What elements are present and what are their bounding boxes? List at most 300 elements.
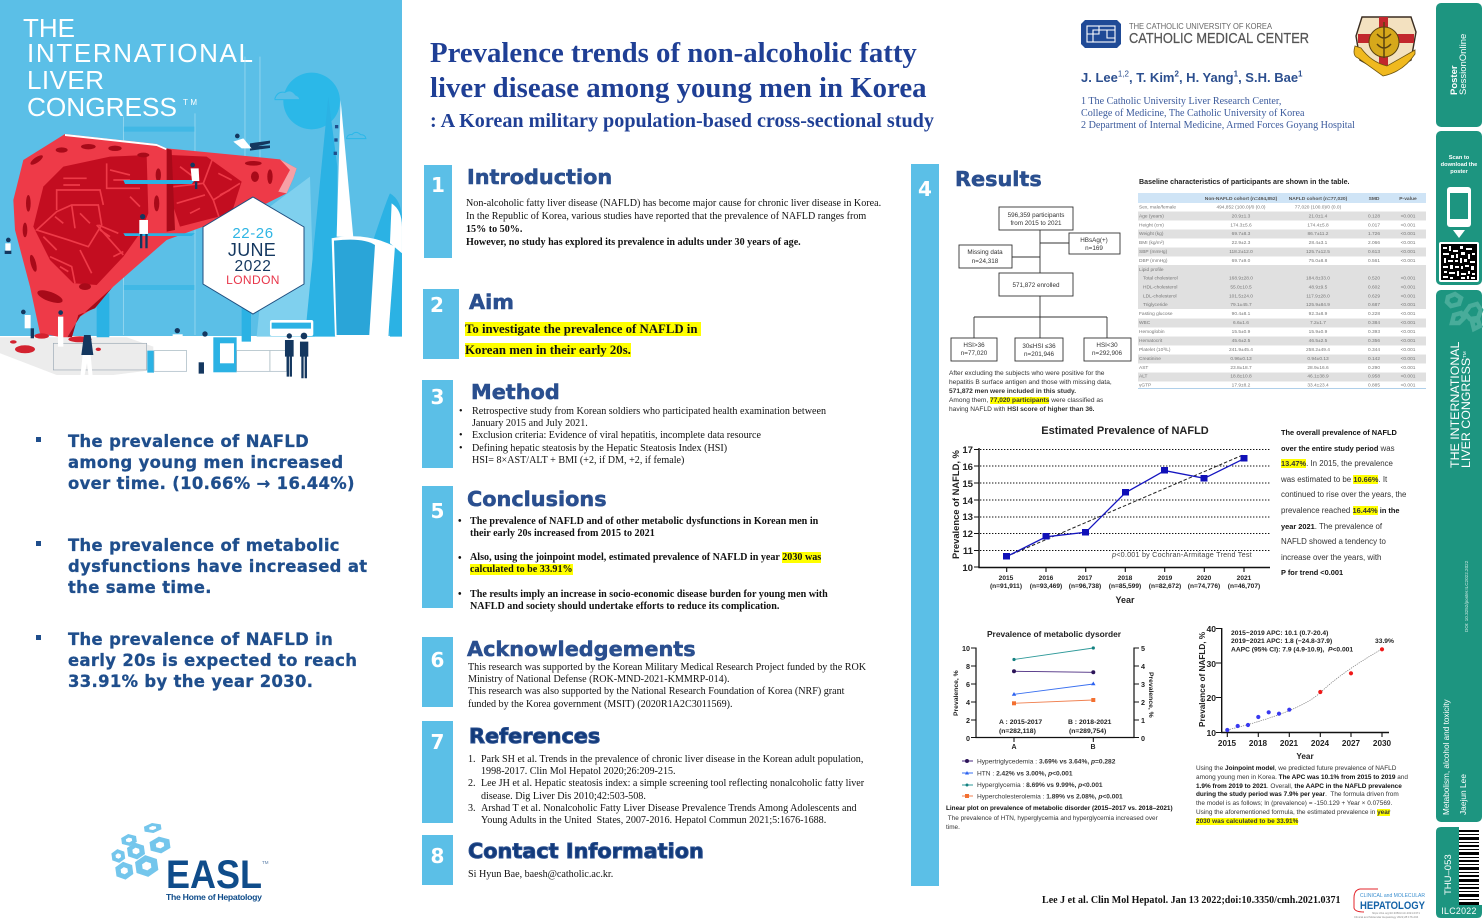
conclusion 2: Also, using the joinpoint model, estimated prevalence of NAFLD in year 2030 was (470, 552, 821, 563)
sidebar: scan to download: download the (1441, 162, 1477, 168)
section number 8: 8 (431, 844, 444, 868)
illustration: red liver (13, 134, 297, 338)
baseline characteristics table: 22.9±2.3 (1232, 240, 1251, 246)
chart: joinpoint projection to 2030: 33.9% (1375, 638, 1394, 645)
chart interpretation text: prevalence reached 16.44% in the (1281, 506, 1400, 515)
baseline characteristics table: 494,852 (100.0)/0 (0.0) (1216, 204, 1266, 210)
baseline characteristics table: 258.2±49.4 (1306, 347, 1330, 353)
chart: joinpoint projection to 2030: 2019~2021 APC: 1.8 (−24.8-37.9) (1231, 638, 1332, 645)
chart: estimated prevalence of NAFLD: p<0.001 by Cochran-Armitage Trend Test (1111, 550, 1252, 559)
key finding 3: 33.91% by the year 2030. (68, 672, 313, 691)
baseline characteristics table: 46.1±38.9 (1307, 374, 1329, 380)
chart: estimated prevalence of NAFLD: 2018 (1118, 575, 1133, 582)
baseline characteristics table: Platelet (10³/L) (1139, 347, 1171, 353)
chart: prevalence of metabolic dysorder: 5 (1141, 644, 1145, 653)
method text: Exclusion criteria: Evidence of viral hepatitis, incomplete data resource (472, 430, 761, 441)
chart: prevalence of metabolic dysorder: 3 (1141, 680, 1145, 689)
key finding 1: over time. (10.66% → 16.44%) (68, 474, 355, 493)
logo: Catholic Medical Center: CATHOLIC MEDICAL CENTER (1129, 31, 1309, 47)
acknowledgement text: This research was supported by the Korean Military Medical Research Project funded by the ROK (468, 662, 866, 673)
legend: HTN : 2.42% vs 3.00%, p<0.001 (977, 770, 1073, 778)
chart: prevalence of metabolic dysorder: 1 (1141, 716, 1145, 725)
chart: joinpoint projection to 2030: 2030 (1373, 739, 1392, 748)
baseline characteristics table: 0.520 (1368, 276, 1380, 282)
baseline characteristics table: 46.5±2.5 (1309, 338, 1328, 344)
chart: joinpoint projection to 2030: 20 (1206, 693, 1216, 703)
joinpoint model text: during the study period was 7.9% per year. The formula driven from (1196, 791, 1399, 798)
flowchart of participants: n=169 (1085, 245, 1103, 252)
chart: prevalence of metabolic dysorder: (n=289,754) (1069, 728, 1106, 735)
baseline characteristics table: <0.001 (1401, 294, 1416, 300)
baseline characteristics table: 23.8±18.7 (1230, 365, 1252, 371)
baseline characteristics table: WBC (1139, 320, 1151, 326)
baseline characteristics table: DBP (mmHg) (1139, 258, 1168, 264)
key finding 1 (36, 432, 355, 493)
baseline characteristics table: LDL-cholesterol (1143, 294, 1177, 300)
panel: references (422, 721, 864, 826)
section number 5: 5 (431, 499, 444, 523)
key finding 1: among young men increased (68, 453, 343, 472)
joinpoint model text: Using the aforementioned formula, the estimated prevalence in year (1196, 809, 1390, 816)
chart: prevalence of metabolic dysorder: B : 2018-2021 (1068, 719, 1112, 726)
section number 3: 3 (431, 385, 444, 409)
panel: results rail (911, 164, 939, 886)
sidebar: poster session online: SessionOnline (1458, 34, 1469, 95)
congress title: THE (23, 13, 75, 43)
conclusion 1: The prevalence of NAFLD and of other metabolic dysfunctions in Korean men in (470, 516, 818, 527)
introduction text: Non-alcoholic fatty liver disease (NAFLD) has become major cause for chronic liver disease in Korea. (466, 198, 881, 209)
chart: prevalence of metabolic dysorder: A (1011, 744, 1017, 751)
baseline characteristics table: 174.3±5.6 (1230, 222, 1252, 228)
baseline characteristics table: 184.8±33.0 (1306, 276, 1330, 282)
baseline characteristics table: 15.9±0.9 (1309, 329, 1328, 335)
baseline characteristics table: <0.001 (1401, 214, 1416, 220)
chart: estimated prevalence of NAFLD: (n=85,599) (1109, 583, 1141, 590)
panel: results rail: 4 (918, 177, 932, 201)
chart: joinpoint projection to 2030: 10 (1206, 728, 1216, 738)
logo: Clinical and Molecular Hepatology (1354, 888, 1426, 919)
conclusion 3: The results imply an increase in socio-economic disease burden for young men with (470, 589, 828, 600)
baseline characteristics table: 0.128 (1368, 214, 1380, 220)
flowchart of participants: HBsAg(+) (1080, 237, 1108, 244)
baseline characteristics table: ALT (1139, 374, 1148, 380)
section number 1 (424, 165, 452, 258)
logo: EASL (111, 823, 269, 902)
chart interpretation text: was estimated to be 10.66%. It (1281, 475, 1387, 484)
baseline characteristics table: γGTP (1139, 382, 1151, 388)
baseline characteristics table: <0.001 (1401, 276, 1416, 282)
baseline characteristics table: <0.001 (1401, 240, 1416, 246)
chart: prevalence of metabolic dysorder: B (1090, 744, 1096, 751)
reference list: 1998-2017. Clin Mol Hepatol 2020;26:209-215. (481, 766, 676, 777)
baseline characteristics table: 101.5±24.0 (1229, 294, 1253, 300)
chart: prevalence of metabolic dysorder: 0 (966, 734, 970, 743)
chart: prevalence of metabolic dysorder: 10 (962, 644, 970, 653)
conclusion 2 (470, 552, 821, 575)
chart: estimated prevalence of NAFLD: 10 (962, 563, 973, 574)
baseline characteristics table: 1.726 (1368, 231, 1380, 237)
section number 7 (422, 721, 453, 823)
baseline characteristics table: <0.001 (1401, 338, 1416, 344)
hexagon: date and city: 2022 (235, 258, 271, 275)
baseline characteristics table: 0.017 (1368, 222, 1380, 228)
reference numbers: 1. (468, 754, 476, 765)
chart: joinpoint projection to 2030: 2015~2019 APC: 10.1 (0.7-20.4) (1231, 630, 1328, 637)
baseline characteristics table: 28.4±3.1 (1309, 240, 1328, 246)
baseline characteristics table: <0.001 (1401, 258, 1416, 264)
reference list (481, 754, 864, 826)
heading: Introduction (467, 165, 612, 189)
baseline characteristics table: 33.4±23.4 (1307, 382, 1329, 388)
flowchart caption: 571,872 men were included in this study. (949, 388, 1076, 395)
panel: acknowledgements (422, 637, 866, 710)
sidebar: abstract number and barcode: ILC2022 (1441, 906, 1477, 916)
main title (430, 37, 934, 132)
chart interpretation text: The overall prevalence of NAFLD (1281, 428, 1397, 437)
conclusion markers: • (458, 516, 462, 527)
baseline characteristics table: 20.9±1.3 (1232, 214, 1251, 220)
congress title: LIVER (27, 65, 104, 95)
baseline characteristics table: Hematocrit (1139, 338, 1163, 344)
illustration: London skyline (97, 57, 402, 342)
baseline characteristics table: 79.1±45.7 (1230, 302, 1252, 308)
chart interpretation text (1281, 428, 1406, 577)
metabolic chart caption (946, 805, 1173, 831)
affiliations: 1 The Catholic University Liver Research Center, (1081, 96, 1281, 107)
contact text: Si Hyun Bae, baesh@catholic.ac.kr. (468, 869, 613, 880)
chart: estimated prevalence of NAFLD: 2019 (1158, 575, 1173, 582)
baseline characteristics table: BMI (kg/m²) (1139, 240, 1164, 246)
baseline characteristics table: <0.001 (1401, 374, 1416, 380)
baseline characteristics table: Fasting glucose (1139, 311, 1173, 317)
flowchart caption: Among them, 77,020 participants were classified as (949, 397, 1103, 404)
sidebar: scan to download: Scan to (1449, 155, 1470, 161)
chart: estimated prevalence of NAFLD: 15 (962, 479, 974, 490)
method list (459, 406, 463, 454)
key finding bullets (36, 432, 367, 691)
joinpoint model text: 2030 was calculated to be 33.91% (1196, 818, 1298, 825)
baseline characteristics table: SMD (1369, 196, 1380, 202)
chart: estimated prevalence of NAFLD: 2015 (999, 575, 1014, 582)
chart: estimated prevalence of NAFLD: 14 (962, 496, 974, 507)
reference numbers (468, 754, 476, 814)
baseline characteristics table: 0.958 (1368, 374, 1380, 380)
legend: Hypercholesterolemia : 1.89% vs 2.08%, p<0.001 (977, 794, 1123, 800)
conclusion 1: their early 20s increased from 2015 to 2021 (470, 528, 655, 539)
section number 5 (422, 486, 453, 608)
heading: results: Results (955, 167, 1042, 191)
baseline characteristics table: 17.9±8.2 (1232, 382, 1251, 388)
panel: aim (423, 289, 701, 359)
baseline characteristics table: 0.629 (1368, 294, 1380, 300)
baseline characteristics table: 75.0±8.8 (1309, 258, 1328, 264)
baseline characteristics table: 48.9±9.5 (1309, 284, 1328, 290)
chart: joinpoint projection to 2030: Year (1296, 752, 1314, 761)
chart: prevalence of metabolic dysorder: Prevalence of metabolic dysorder (987, 629, 1122, 639)
introduction text: In the Republic of Korea, various studies have reported that the prevalence of NAFLD ranges from (466, 211, 866, 222)
introduction text: 15% to 50%. (466, 224, 522, 235)
baseline characteristics table: 55.0±10.5 (1230, 284, 1252, 290)
chart: prevalence of metabolic dysorder: 0 (1141, 734, 1145, 743)
baseline characteristics table: 92.3±8.9 (1309, 311, 1328, 317)
key finding 3 (36, 630, 357, 691)
conclusion 2: calculated to be 33.91% (470, 564, 573, 575)
flowchart of participants: 596,359 participants (1008, 212, 1064, 219)
chart interpretation text: year 2021. The prevalence of (1281, 522, 1382, 531)
introduction text (466, 198, 881, 248)
baseline characteristics table: 0.356 (1368, 338, 1380, 344)
baseline characteristics table: Total cholesterol (1143, 276, 1178, 282)
section number 6 (422, 637, 453, 707)
heading: Aim (469, 290, 514, 314)
logo: Catholic Medical Center (1081, 20, 1309, 48)
sidebar: congress and session: THE INTERNATIONAL (1448, 341, 1462, 468)
baseline characteristics table: 0.290 (1368, 365, 1380, 371)
chart: joinpoint projection to 2030 (1198, 624, 1394, 761)
flowchart of participants: 30≤HSI ≤36 (1022, 343, 1056, 350)
chart: prevalence of metabolic dysorder: 2 (966, 716, 970, 725)
chart: prevalence of metabolic dysorder (953, 629, 1154, 800)
joinpoint model text: the model is as follows; ln (prevalence) = -150.129 + Year × 0.07569. (1196, 800, 1392, 807)
baseline characteristics table: Age (years) (1139, 214, 1164, 220)
authors: J. Lee1,2, T. Kim2, H. Yang1, S.H. Bae1 (1081, 70, 1302, 85)
flowchart of participants: Missing data (967, 249, 1003, 256)
reference list: disease. Dig Liver Dis 2010;42:503-508. (481, 791, 646, 802)
legend: Hyperglycemia : 8.69% vs 9.99%, p<0.001 (977, 782, 1103, 789)
logo: Clinical and Molecular Hepatology: Clinical and Molecular Hepatology 2022;28:176-204 (1354, 915, 1419, 919)
chart: prevalence of metabolic dysorder: 8 (966, 662, 970, 671)
table title: Baseline characteristics of participants are shown in the table. (1139, 178, 1350, 186)
section number 2: 2 (430, 293, 444, 317)
section number 8 (422, 835, 453, 885)
sidebar: scan to download: poster (1450, 169, 1468, 175)
joinpoint model text: among young men in Korea. The APC was 10.1% from 2015 to 2019 and (1196, 774, 1408, 781)
chart: estimated prevalence of NAFLD: (n=82,672) (1149, 583, 1181, 590)
baseline characteristics table: 45.6±2.5 (1232, 338, 1251, 344)
text: Prevalence, % (1147, 672, 1154, 718)
joinpoint model text: 1.9% from 2019 to 2021. Overall, the AAPC in the NAFLD prevalence (1196, 783, 1402, 790)
hexagon: date and city (203, 197, 304, 314)
panel: contact information (422, 835, 704, 885)
flowchart caption: After excluding the subjects who were positive for the (949, 370, 1104, 377)
baseline characteristics table: 69.7±8.3 (1232, 231, 1251, 237)
baseline characteristics table: <0.001 (1401, 222, 1416, 228)
baseline characteristics table: 241.9±45.4 (1229, 347, 1253, 353)
baseline characteristics table: <0.001 (1401, 311, 1416, 317)
sidebar: scan to download (1436, 131, 1482, 285)
congress title: TM (183, 98, 197, 107)
heading: Acknowledgements (467, 637, 696, 661)
chart: estimated prevalence of NAFLD: 12 (962, 529, 973, 540)
heading: Contact Information (468, 839, 704, 863)
main title: : A Korean military population-based cross-sectional study (430, 110, 934, 132)
section number 1: 1 (431, 173, 445, 197)
method text: Defining hepatic steatosis by the Hepatic Steatosis Index (HSI) (472, 443, 727, 454)
baseline characteristics table: Lipid profile (1139, 267, 1164, 273)
flowchart of participants: n=292,906 (1092, 350, 1122, 357)
baseline characteristics table: SBP (mmHg) (1139, 249, 1168, 255)
sidebar: congress and session: DOI: 10.3252/poster.ILC2022.2022 (1464, 560, 1469, 632)
sidebar: congress and session: LIVER CONGRESS (1459, 358, 1473, 468)
baseline characteristics table: 0.613 (1368, 249, 1380, 255)
baseline characteristics table: <0.001 (1401, 365, 1416, 371)
chart: estimated prevalence of NAFLD: Prevalence of NAFLD, % (950, 449, 961, 559)
chart: estimated prevalence of NAFLD: (n=46,707) (1228, 583, 1260, 590)
baseline characteristics table: 125.7±12.5 (1306, 249, 1330, 255)
chart: joinpoint projection to 2030: 2024 (1311, 739, 1330, 748)
baseline characteristics table: 7.2±1.7 (1310, 320, 1326, 326)
key finding 3: early 20s is expected to reach (68, 651, 357, 670)
metabolic chart caption: time. (946, 824, 960, 831)
flowchart of participants: HSI<30 (1096, 342, 1118, 349)
chart: estimated prevalence of NAFLD: 2020 (1197, 575, 1212, 582)
baseline characteristics table: 86.7±11.2 (1308, 231, 1329, 237)
chart interpretation text: continued to rise over the years, the (1281, 490, 1406, 499)
legend: Hypertriglycedemia : 3.69% vs 3.64%, p=0.282 (977, 758, 1116, 766)
reference list: Arshad T et al. Nonalcoholic Fatty Liver Disease Prevalence Trends Among Adolescents and (481, 803, 857, 814)
chart: prevalence of metabolic dysorder: Prevalence, % (953, 670, 960, 716)
baseline characteristics table: 0.687 (1368, 302, 1380, 308)
baseline characteristics table: <0.001 (1401, 284, 1416, 290)
chart interpretation text: 13.47%. In 2015, the prevalence (1281, 459, 1393, 468)
sidebar: congress and session: Metabolism, alcohol and toxicity (1442, 699, 1451, 815)
baseline characteristics table: Triglyceride (1143, 302, 1168, 308)
method text: HSI= 8×AST/ALT + BMI (+2, if DM, +2, if female) (472, 455, 684, 466)
method list: • (459, 430, 463, 441)
baseline characteristics table: Height (cm) (1139, 222, 1164, 228)
baseline characteristics table: 118.2±12.0 (1229, 249, 1253, 255)
baseline characteristics table: 2.066 (1368, 240, 1380, 246)
section number 3 (422, 380, 453, 468)
baseline characteristics table: 69.7±9.0 (1232, 258, 1251, 264)
baseline characteristics table: HDL-cholesterol (1143, 284, 1177, 290)
chart: prevalence of metabolic dysorder: 2 (1141, 698, 1145, 707)
reference list: Lee JH et al. Hepatic steatosis index: a simple screening tool reflecting nonalcoholic fatty liver (481, 778, 864, 789)
flowchart of participants: n=201,946 (1024, 351, 1054, 358)
sidebar: congress and session: Jaejun Lee (1458, 774, 1468, 815)
key finding 2: the same time. (68, 578, 212, 597)
sidebar: abstract number and barcode (1436, 827, 1482, 918)
baseline characteristics table: 0.96±0.13 (1230, 356, 1252, 362)
hexagon: date and city: LONDON (226, 273, 280, 287)
baseline characteristics table (1138, 178, 1426, 389)
baseline characteristics table: <0.001 (1401, 320, 1416, 326)
logo: Catholic Medical Center: THE CATHOLIC UNIVERSITY OF KOREA (1129, 21, 1272, 31)
conclusion markers: • (458, 553, 462, 564)
method list: • (459, 406, 463, 417)
chart: estimated prevalence of NAFLD: (n=91,911) (990, 583, 1022, 590)
chart: estimated prevalence of NAFLD: (n=93,469) (1030, 583, 1062, 590)
chart: joinpoint projection to 2030: 30 (1206, 659, 1216, 669)
baseline characteristics table: 0.393 (1368, 329, 1380, 335)
citation: Lee J et al. Clin Mol Hepatol. Jan 13 2022;doi:10.3350/cmh.2021.0371 (1042, 895, 1341, 906)
chart: estimated prevalence of NAFLD: 16 (962, 462, 973, 473)
chart: joinpoint projection to 2030: AAPC (95% CI): 7.9 (4.9-10.9), P<0.001 (1231, 646, 1353, 654)
aim statement: To investigate the prevalence of NAFLD in (465, 322, 697, 336)
baseline characteristics table: 15.5±0.9 (1232, 329, 1251, 335)
conclusion markers (458, 516, 462, 600)
panel: method (422, 380, 826, 468)
chart: estimated prevalence of NAFLD: Estimated Prevalence of NAFLD (1041, 425, 1209, 437)
acknowledgement text: funded by the Korea government (MSIT) (2020R1A2C3011569). (468, 699, 733, 710)
logo: Clinical and Molecular Hepatology: https://doi.org/10.3350/cmh.2021.0371 (1372, 911, 1420, 915)
chart: estimated prevalence of NAFLD: (n=74,776) (1188, 583, 1220, 590)
affiliations (1081, 96, 1355, 131)
flowchart of participants: from 2015 to 2021 (1010, 220, 1062, 227)
chart: joinpoint projection to 2030: Prevalence of NAFLD, % (1198, 631, 1207, 727)
conclusion 3: NAFLD and society should undertake efforts to reduce its complication. (470, 601, 779, 612)
chart interpretation text: over the entire study period was (1281, 444, 1395, 453)
baseline characteristics table: 21.0±1.4 (1309, 214, 1328, 220)
affiliations: 2 Department of Internal Medicine, Armed Forces Goyang Hospital (1081, 120, 1355, 131)
chart: estimated prevalence of NAFLD: 11 (963, 546, 974, 557)
conclusion 3 (470, 589, 828, 612)
flowchart caption: hepatitis B surface antigen and those with missing data, (949, 379, 1112, 386)
baseline characteristics table: P-value (1399, 196, 1417, 202)
metabolic chart caption: Linear plot on prevalence of metabolic disorder (2015–2017 vs. 2018–2021) (946, 805, 1173, 812)
chart interpretation text: P for trend <0.001 (1281, 568, 1343, 577)
key finding 2: The prevalence of metabolic (68, 536, 340, 555)
baseline characteristics table: 0.384 (1368, 320, 1380, 326)
panel: conclusions (422, 486, 828, 612)
aim statement (465, 322, 701, 357)
baseline characteristics table: 174.4±5.8 (1307, 222, 1329, 228)
introduction text: However, no study has explored its prevalence in adults under 30 years of age. (466, 237, 801, 248)
chart: estimated prevalence of NAFLD: 2017 (1078, 575, 1093, 582)
chart: prevalence of metabolic dysorder: 4 (1141, 662, 1145, 671)
logo: EASL: TM (262, 860, 269, 865)
baseline characteristics table: Creatinine (1139, 356, 1161, 362)
baseline characteristics table: 0.142 (1368, 356, 1380, 362)
reference numbers: 2. (468, 778, 476, 789)
chart: joinpoint projection to 2030: 2021 (1280, 739, 1299, 748)
chart: estimated prevalence of NAFLD (950, 425, 1270, 605)
sidebar: poster session online: Poster (1449, 65, 1460, 95)
key finding 2: dysfunctions have increased at (68, 557, 367, 576)
acknowledgement text: Ministry of National Defense (ROK-MND-2021-KMMRP-014). (468, 674, 730, 685)
baseline characteristics table: 18.8±10.8 (1230, 374, 1252, 380)
baseline characteristics table: Sex, male/female (1139, 204, 1176, 210)
method text (472, 406, 826, 466)
reference numbers: 3. (468, 803, 476, 814)
baseline characteristics table: 77,020 (100.0)/0 (0.0) (1295, 204, 1342, 210)
affiliations: College of Medicine, The Catholic University of Korea (1081, 108, 1304, 119)
hexagon: date and city: JUNE (228, 240, 276, 260)
method text: Retrospective study from Korean soldiers who participated health examination between (472, 406, 826, 417)
conclusion 1 (470, 516, 818, 539)
baseline characteristics table: 6.6±1.6 (1233, 320, 1249, 326)
heading: Conclusions (467, 487, 607, 511)
chart: estimated prevalence of NAFLD: 2016 (1039, 575, 1054, 582)
key finding 3: The prevalence of NAFLD in (68, 630, 333, 649)
baseline characteristics table: Hemoglobin (1139, 329, 1165, 335)
section number 7: 7 (431, 730, 444, 754)
key finding 2 (36, 536, 367, 597)
reference list: Young Adults in the United States, 2007-2016. Hepatol Commun 2021;5:1676-1688. (481, 815, 826, 826)
heading: References (469, 724, 600, 748)
aim statement: Korean men in their early 20s. (465, 343, 631, 357)
panel: congress banner illustration (0, 0, 402, 378)
chart: prevalence of metabolic dysorder: 6 (966, 680, 970, 689)
baseline characteristics table: 0.602 (1368, 284, 1380, 290)
chart interpretation text: NAFLD showed a tendency to (1281, 537, 1386, 546)
baseline characteristics table: 168.9±28.0 (1229, 276, 1253, 282)
section number 6: 6 (431, 648, 444, 672)
chart: estimated prevalence of NAFLD: 17 (962, 445, 973, 456)
joinpoint model text: Using the Joinpoint model, we predicted future prevalence of NAFLD (1196, 765, 1396, 772)
flowchart caption: having NAFLD with HSI score of higher than 36. (949, 406, 1094, 413)
baseline characteristics table: 0.344 (1368, 347, 1380, 353)
